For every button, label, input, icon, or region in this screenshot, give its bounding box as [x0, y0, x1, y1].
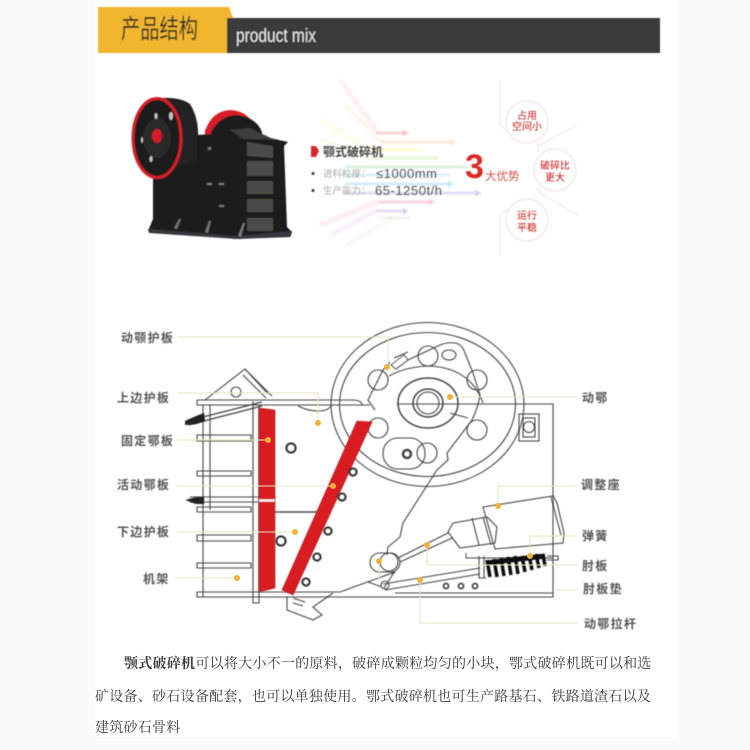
fixed jaw plate	[259, 408, 275, 592]
product name: 颚式破碎机	[323, 144, 383, 159]
part labels right: 动鄂	[582, 391, 609, 405]
structure diagram	[117, 322, 637, 631]
movable jaw plate	[282, 421, 372, 595]
capacity: 65-1250t/h	[375, 183, 442, 198]
three advantages	[465, 80, 578, 255]
machine photo: jaw crusher	[133, 98, 292, 239]
description paragraph: 颚式破碎机可以将大小不一的原料，破碎成颗粒均匀的小块，鄂式破碎机既可以和选	[124, 657, 652, 672]
advantage: high crushing ratio: 破碎比	[540, 159, 570, 172]
decorative arrows background	[320, 80, 482, 245]
spec marker	[311, 146, 319, 157]
description paragraph: 建筑砂石骨料	[95, 721, 181, 736]
advantage: smooth operation: 运行	[517, 209, 537, 222]
part labels right: 调整座	[581, 477, 621, 492]
part labels left: 上边护板	[117, 390, 170, 405]
part labels right: 肘板垫	[583, 581, 623, 596]
capacity	[312, 183, 442, 198]
product specs	[311, 144, 442, 198]
advantage: high crushing ratio: 更大	[545, 171, 565, 184]
advantage: smooth operation: 平稳	[517, 221, 537, 234]
feed size	[312, 166, 437, 181]
part labels right: 动鄂拉杆	[584, 616, 637, 631]
part labels right	[581, 391, 637, 631]
description paragraph	[95, 656, 652, 736]
advantage: small footprint	[506, 101, 548, 143]
advantage: small footprint: 占用	[517, 109, 537, 122]
feed size: 进料粒度：	[323, 168, 371, 180]
adjusting rods	[185, 413, 275, 504]
advantages caption: 大优势	[485, 169, 520, 183]
leader lines	[175, 337, 577, 623]
part labels left	[117, 330, 174, 586]
header subtitle: product mix	[236, 26, 316, 47]
header banner	[98, 7, 660, 53]
marker dots	[234, 364, 533, 583]
spring	[486, 554, 545, 577]
big red flywheel	[133, 98, 181, 178]
advantage: small footprint: 空间小	[512, 120, 542, 133]
part labels left: 活动鄂板	[117, 477, 170, 492]
part labels right: 肘板	[582, 558, 609, 573]
capacity: 生产能力：	[323, 185, 371, 197]
frame	[187, 369, 553, 603]
part labels left: 动颚护板	[121, 330, 174, 345]
feed size: ≤1000mm	[376, 166, 437, 181]
advantage: high crushing ratio	[534, 149, 576, 191]
flywheel	[331, 322, 524, 555]
header title: 产品结构	[121, 14, 198, 44]
part labels left: 机架	[143, 571, 170, 586]
lower mechanism	[287, 496, 564, 620]
advantage: smooth operation	[506, 199, 548, 241]
part labels left: 固定鄂板	[121, 433, 174, 448]
part labels left: 下边护板	[117, 524, 170, 539]
part labels right: 弹簧	[582, 528, 609, 543]
description paragraph: 矿设备、砂石设备配套，也可以单独使用。鄂式破碎机也可生产路基石、铁路道渣石以及	[95, 690, 651, 705]
plate bolts	[276, 444, 356, 586]
big number 3: 3	[465, 148, 484, 186]
